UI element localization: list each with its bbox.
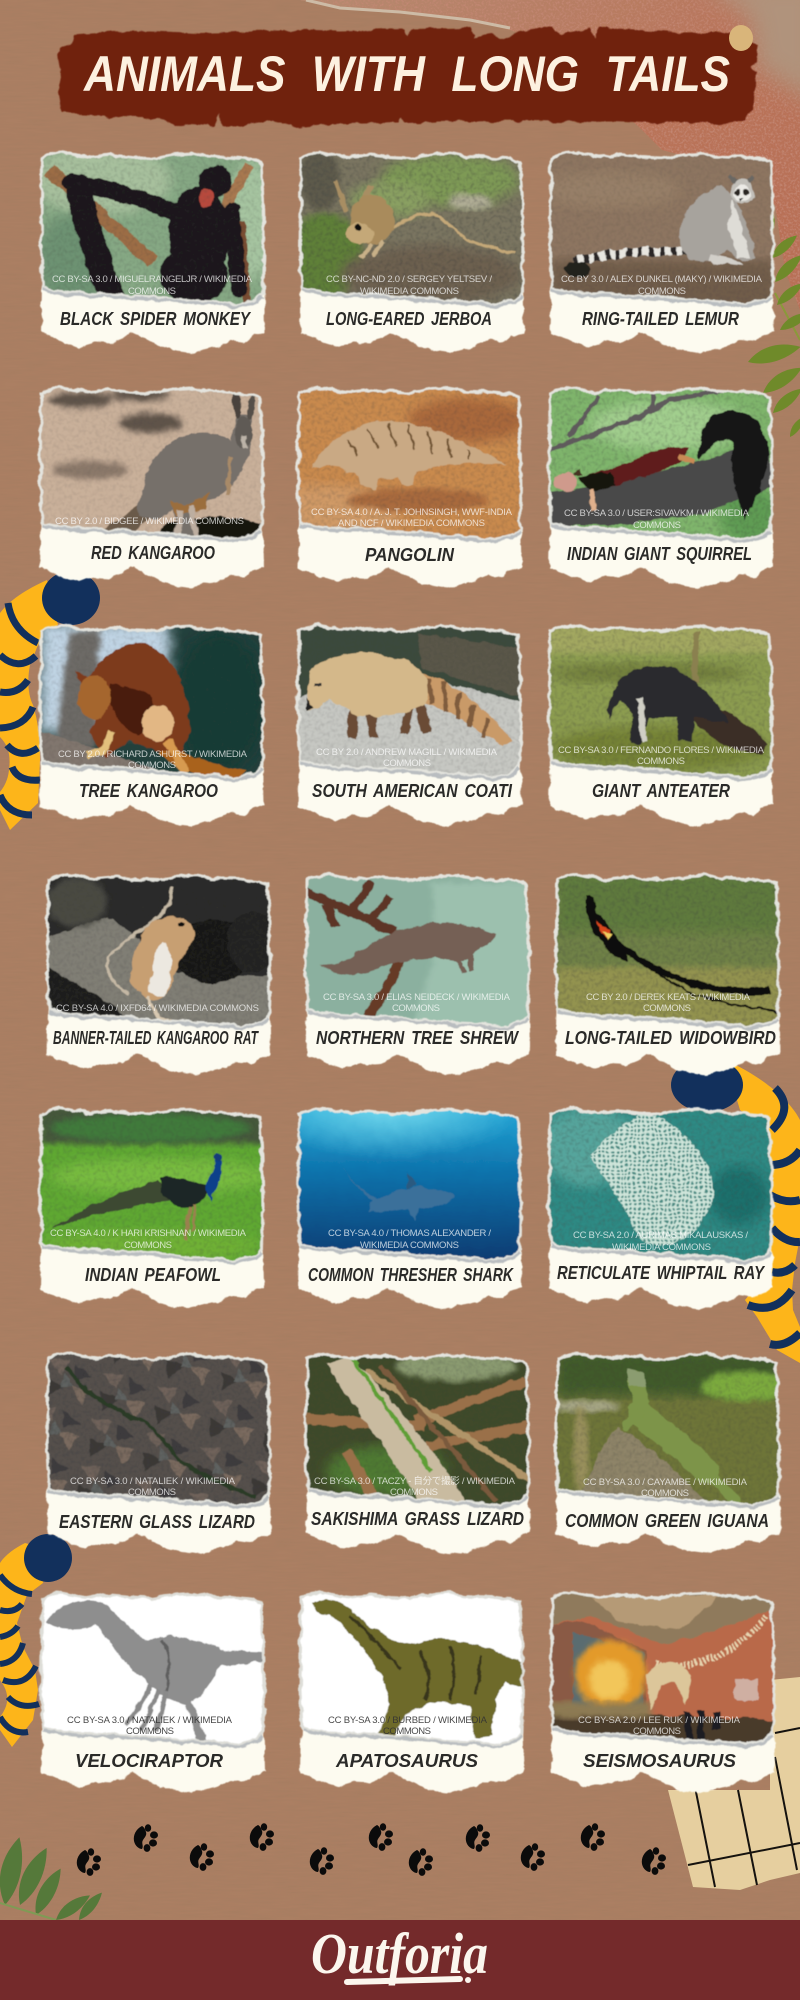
credit line 2: COMMONS	[128, 1487, 176, 1498]
card: Common Green Iguana	[541, 1351, 791, 1554]
photo: velociraptor	[41, 1590, 267, 1750]
photo: whiptail ray	[539, 1106, 775, 1266]
credit line 2: COMMONS	[128, 286, 176, 297]
name: RED KANGAROO	[91, 543, 215, 563]
lower left striped tail	[0, 1534, 72, 1747]
card: Giant Anteater	[549, 623, 775, 826]
fern bottom left	[0, 1835, 105, 1924]
credit: CC BY-SA 3.0 / CAYAMBE / WIKIMEDIA	[583, 1477, 748, 1488]
card: Black Spider Monkey	[31, 145, 276, 353]
credit: CC BY 3.0 / ALEX DUNKEL (MAKY) / WIKIMEDIA	[561, 274, 763, 285]
name: RING-TAILED LEMUR	[582, 309, 739, 329]
photo: grass lizard	[306, 1351, 532, 1511]
credit: CC BY-SA 2.0 / AURIMAS MIKALAUSKAS /	[573, 1230, 748, 1241]
photo: kangaroo rat	[47, 872, 277, 1032]
card: Reticulate Whiptail Ray	[539, 1106, 775, 1309]
credit: CC BY-NC-ND 2.0 / SERGEY YELTSEV /	[326, 274, 492, 285]
card: Indian Peafowl	[40, 1106, 270, 1309]
credit line 2: WIKIMEDIA COMMONS	[360, 1240, 459, 1251]
card: Velociraptor	[41, 1590, 267, 1793]
credit: CC BY 2.0 / ANDREW MAGILL / WIKIMEDIA	[316, 747, 498, 758]
card: South American Coati	[298, 623, 524, 826]
credit line 2: COMMONS	[383, 758, 431, 769]
card: Long-Eared Jerboa	[287, 150, 526, 353]
credit line 2: WIKIMEDIA COMMONS	[612, 1242, 711, 1253]
photo: lemur	[550, 153, 774, 304]
photo: red kangaroo	[40, 385, 270, 545]
credit line 2: COMMONS	[637, 756, 685, 767]
name: GIANT ANTEATER	[592, 781, 730, 801]
card: Northern Tree Shrew	[306, 872, 532, 1075]
credit: CC BY-SA 4.0 / A. J. T. JOHNSINGH, WWF-INDIA	[311, 507, 513, 518]
credit: CC BY 2.0 / RICHARD ASHURST / WIKIMEDIA	[58, 749, 248, 760]
credit line 2: COMMONS	[390, 1487, 438, 1498]
name: SOUTH AMERICAN COATI	[312, 781, 513, 801]
name: COMMON THRESHER SHARK	[308, 1265, 515, 1285]
credit: CC BY-SA 4.0 / K HARI KRISHNAN / WIKIMEDIA	[50, 1228, 247, 1239]
torn rust paper corner	[300, 0, 800, 310]
photo: peafowl	[40, 1106, 270, 1266]
credit: CC BY-SA 4.0 / IXFD64 / WIKIMEDIA COMMONS	[56, 1003, 259, 1014]
photo: seismosaurus skeleton	[551, 1590, 777, 1750]
card: Eastern Glass Lizard	[47, 1351, 273, 1554]
card: Indian Giant Squirrel	[549, 385, 779, 588]
name: SAKISHIMA GRASS LIZARD	[311, 1509, 524, 1529]
name: BLACK SPIDER MONKEY	[60, 309, 252, 329]
credit: CC BY 2.0 / BIDGEE / WIKIMEDIA COMMONS	[55, 516, 244, 527]
credit line 2: COMMONS	[641, 1488, 689, 1499]
name: LONG-TAILED WIDOWBIRD	[565, 1028, 776, 1048]
photo: coati	[298, 623, 524, 783]
card: Long-Tailed Widowbird	[556, 872, 782, 1075]
credit line 2: COMMONS	[392, 1003, 440, 1014]
logo: Outforia	[311, 1921, 488, 1986]
footer band	[0, 1920, 800, 2000]
photo: widowbird	[556, 872, 782, 1032]
credit: CC BY-SA 3.0 / BURBED / WIKIMEDIA	[328, 1715, 488, 1726]
credit line 2: COMMONS	[633, 1726, 681, 1737]
credit: CC BY-SA 3.0 / MIGUELRANGELJR / WIKIMEDIA	[52, 274, 253, 285]
card: Ring-Tailed Lemur	[540, 150, 776, 353]
credit line 2: WIKIMEDIA COMMONS	[360, 286, 459, 297]
card: Sakishima Grass Lizard	[306, 1351, 532, 1554]
card: Seismosaurus	[551, 1590, 777, 1793]
photo: spider monkey	[40, 152, 264, 305]
card: Banner-Tailed Kangaroo Rat	[47, 872, 277, 1075]
name: COMMON GREEN IGUANA	[565, 1511, 769, 1531]
credit: CC BY-SA 4.0 / THOMAS ALEXANDER /	[328, 1228, 491, 1239]
icon: pin	[729, 25, 753, 51]
name: NORTHERN TREE SHREW	[316, 1028, 520, 1048]
credit line 2: COMMONS	[633, 520, 681, 531]
credit line 2: COMMONS	[128, 760, 176, 771]
credit line 2: COMMONS	[638, 286, 686, 297]
photo: pangolin	[298, 389, 521, 540]
credit: CC BY-SA 3.0 / TACZY - 自分で撮影 / WIKIMEDIA	[314, 1475, 516, 1487]
name: INDIAN GIANT SQUIRREL	[567, 544, 752, 564]
photo: jerboa	[300, 153, 523, 304]
name: LONG-EARED JERBOA	[326, 309, 492, 329]
fern right	[746, 214, 800, 439]
name: TREE KANGAROO	[79, 781, 218, 801]
credit: CC BY-SA 2.0 / LEE RUK / WIKIMEDIA	[578, 1715, 741, 1726]
name: VELOCIRAPTOR	[75, 1751, 223, 1771]
card: Pangolin	[294, 385, 524, 588]
name: SEISMOSAURUS	[583, 1751, 736, 1771]
paw prints trail	[77, 1823, 666, 1876]
credit: CC BY-SA 3.0 / USER:SIVAVKM / WIKIMEDIA	[564, 508, 750, 519]
photo: glass lizard	[47, 1351, 273, 1511]
credit line 2: AND NCF / WIKIMEDIA COMMONS	[338, 518, 485, 529]
photo: apatosaurus	[300, 1590, 526, 1750]
credit: CC BY 2.0 / DEREK KEATS / WIKIMEDIA	[586, 992, 751, 1003]
photo: thresher shark	[298, 1106, 524, 1266]
name: BANNER-TAILED KANGAROO RAT	[53, 1028, 259, 1048]
credit: CC BY-SA 3.0 / NATALIEK / WIKIMEDIA	[67, 1715, 233, 1726]
credit line 2: COMMONS	[643, 1003, 691, 1014]
right striped tail	[671, 1058, 800, 1363]
card: Common Thresher Shark	[298, 1106, 524, 1309]
credit line 2: COMMONS	[124, 1240, 172, 1251]
credit line 2: COMMONS	[126, 1726, 174, 1737]
name: EASTERN GLASS LIZARD	[59, 1512, 255, 1532]
name: APATOSAURUS	[335, 1751, 478, 1771]
title: ANIMALS WITH LONG TAILS	[82, 46, 730, 102]
name: INDIAN PEAFOWL	[85, 1265, 221, 1285]
title banner	[58, 27, 757, 127]
left striped tail	[0, 571, 100, 830]
photo: anteater	[549, 623, 775, 783]
card: Apatosaurus	[300, 1590, 526, 1793]
photo: giant squirrel	[549, 385, 779, 545]
credit: CC BY-SA 3.0 / ELIAS NEIDECK / WIKIMEDIA	[323, 992, 511, 1003]
beige grid note paper	[668, 1677, 800, 1890]
card: Red Kangaroo	[40, 385, 270, 588]
photo: iguana	[541, 1351, 791, 1511]
credit: CC BY-SA 3.0 / NATALIEK / WIKIMEDIA	[70, 1476, 236, 1487]
credit: CC BY-SA 3.0 / FERNANDO FLORES / WIKIMEDIA	[558, 745, 765, 756]
card: Tree Kangaroo	[40, 623, 266, 826]
photo: tree shrew	[306, 872, 532, 1032]
photo: tree kangaroo	[40, 623, 266, 783]
name: PANGOLIN	[365, 545, 455, 565]
credit line 2: COMMONS	[383, 1726, 431, 1737]
